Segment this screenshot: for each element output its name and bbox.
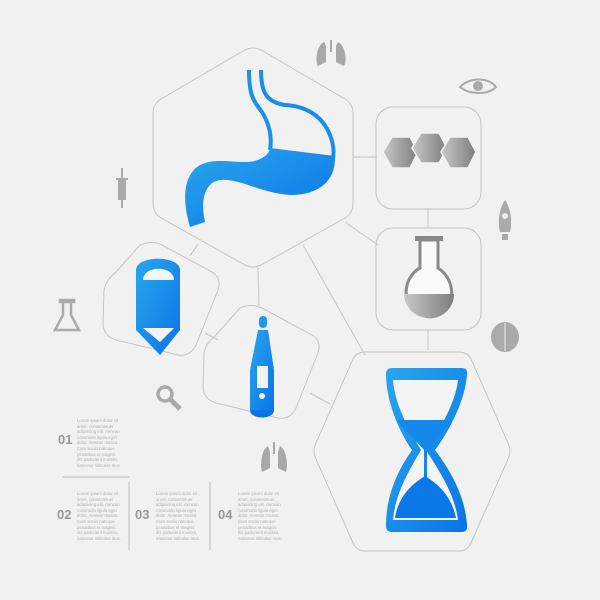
icon: molecule bbox=[383, 133, 476, 168]
icon: flask bbox=[404, 236, 454, 318]
icon: thermometer bbox=[250, 316, 274, 418]
icon: lungs bottom bbox=[261, 442, 287, 472]
text: 03 bbox=[135, 507, 149, 522]
text block 01 bbox=[58, 418, 121, 468]
panel: hourglass hexagon bbox=[314, 352, 510, 551]
icon: pencil bbox=[136, 259, 180, 355]
text: Lorem ipsum dolor sit amet, consectetuer adipiscing elit. Aenean commodo ligula eget dolor. Aenean massa. Cum sociis natoque penatibus et magnis dis parturient montes, nascetur ridiculus mus. bbox=[77, 491, 121, 541]
icon: brain bbox=[491, 322, 519, 352]
icon: flask left bbox=[55, 300, 79, 330]
text block 02 bbox=[57, 491, 121, 541]
text: 04 bbox=[218, 507, 232, 522]
text: 02 bbox=[57, 507, 71, 522]
panel: flask square bbox=[376, 228, 481, 330]
text: Lorem ipsum dolor sit amet, consectetuer adipiscing elit. Aenean commodo ligula eget dolor. Aenean massa. Cum sociis natoque penatibus et magnis dis parturient montes, nascetur ridiculus mus. bbox=[238, 491, 282, 541]
icon: hourglass bbox=[386, 368, 467, 532]
text: Lorem ipsum dolor sit amet, consectetuer adipiscing elit. Aenean commodo ligula eget dolor. Aenean massa. Cum sociis natoque penatibus et magnis dis parturient montes, nascetur ridiculus mus. bbox=[156, 491, 200, 541]
icon: syringe bbox=[116, 168, 128, 208]
panel: thermometer hexagon bbox=[203, 306, 319, 418]
text block 03 bbox=[135, 491, 200, 541]
text block 04 bbox=[218, 491, 282, 541]
panel: stomach hexagon bbox=[153, 48, 353, 267]
text: Lorem ipsum dolor sit amet, consectetuer adipiscing elit. Aenean commodo ligula eget dolor. Aenean massa. Cum sociis natoque penatibus et magnis dis parturient montes, nascetur ridiculus mus. bbox=[77, 418, 121, 468]
icon: rocket bbox=[499, 200, 511, 240]
icon: eye bbox=[460, 80, 496, 93]
text: 01 bbox=[58, 432, 72, 447]
icon: lungs top bbox=[316, 40, 346, 66]
icon: stomach bbox=[185, 70, 335, 227]
panel: molecule square bbox=[376, 107, 481, 209]
icon: magnifier bbox=[158, 387, 180, 409]
panel: pencil hexagon bbox=[103, 242, 219, 355]
